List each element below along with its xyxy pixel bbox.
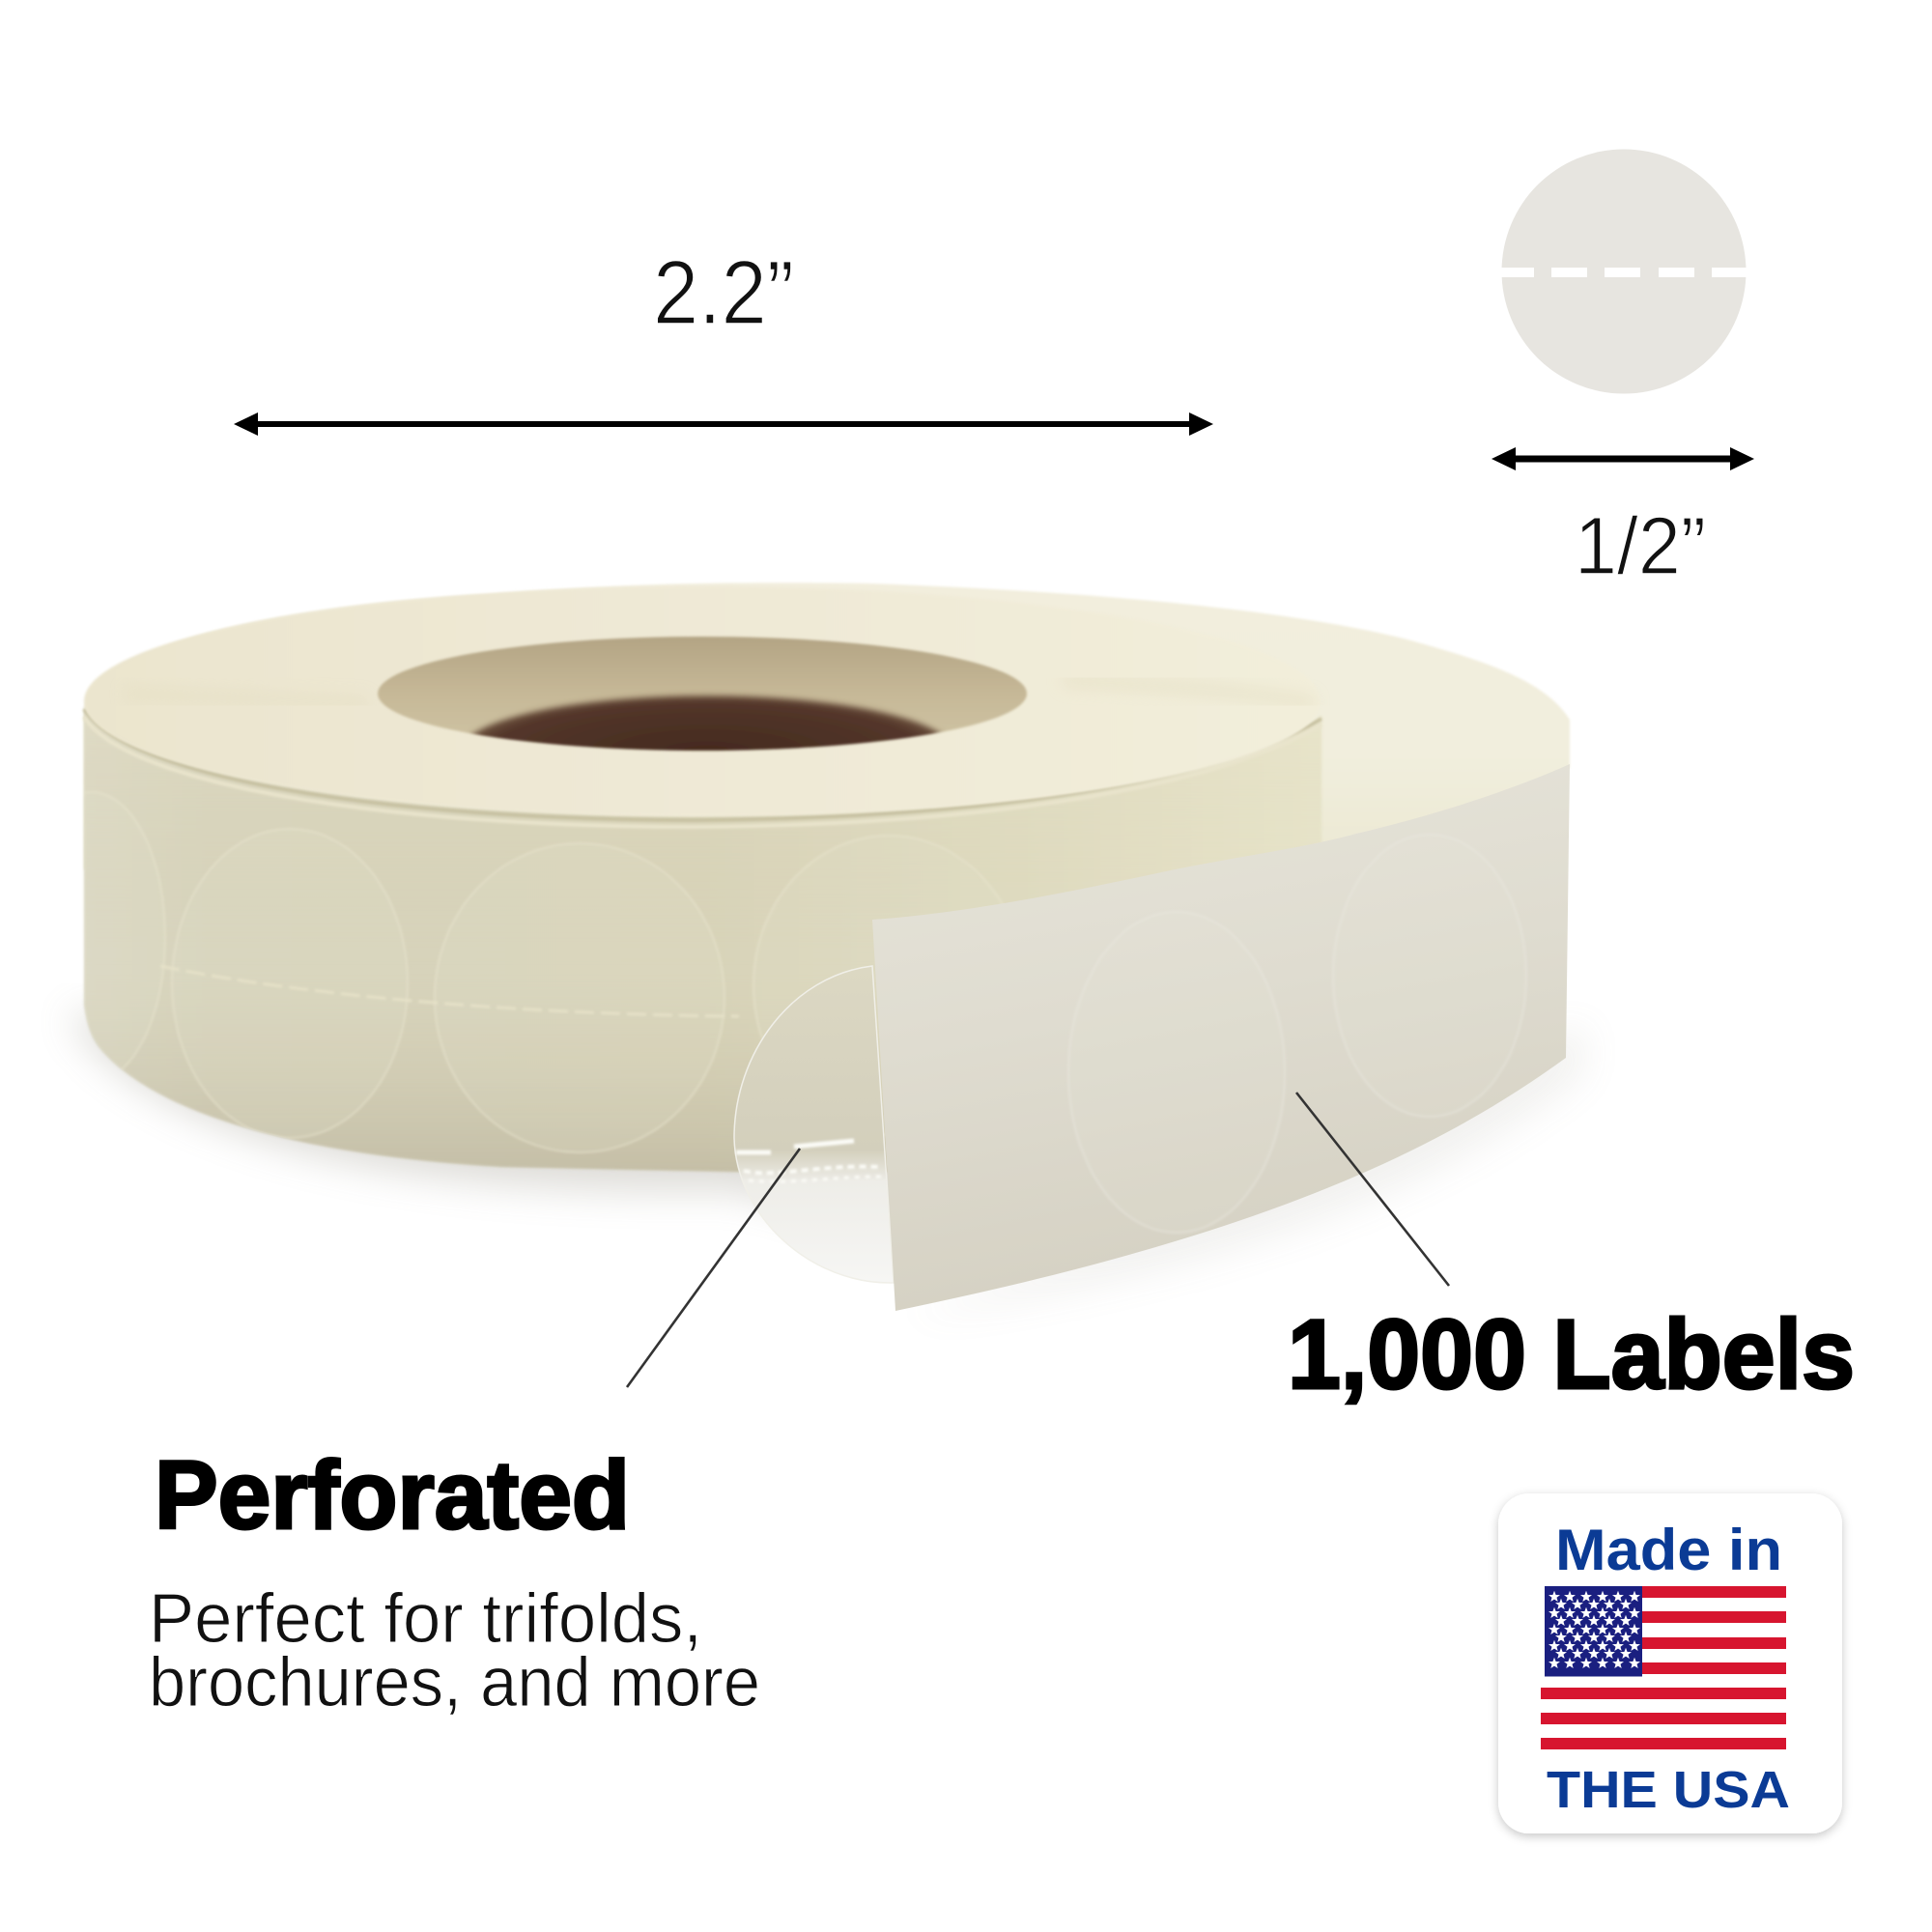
description text: brochures, and more bbox=[149, 1644, 760, 1721]
callout line: 1,000 labels bbox=[1296, 1093, 1449, 1286]
width label: 2.2 inches: 2.2” bbox=[653, 242, 794, 343]
roll outer side bbox=[84, 708, 1321, 1172]
badge text top: Made in bbox=[1555, 1518, 1782, 1582]
labels visible on roll side bbox=[124, 844, 885, 1153]
description text bbox=[149, 1580, 760, 1721]
roll ground shadow bbox=[68, 1014, 1584, 1316]
icon: label circle with perforation bbox=[1497, 149, 1750, 394]
clear peeled label bbox=[734, 966, 894, 1283]
callout heading: 1,000 Labels: 1,000 Labels bbox=[1288, 1299, 1855, 1409]
roll side shading bbox=[84, 708, 1321, 1172]
roll top edge layers bbox=[84, 709, 1321, 827]
description text: Perfect for trifolds, bbox=[149, 1580, 702, 1658]
icon: American flag bbox=[1541, 1586, 1786, 1749]
perforation line on roll bbox=[160, 966, 739, 1016]
product photo: label roll bbox=[18, 582, 1584, 1316]
diameter label: 1/2 inch: 1/2” bbox=[1575, 500, 1706, 591]
arrow: label diameter bbox=[1492, 447, 1754, 470]
callout line: perforated bbox=[627, 1149, 800, 1387]
badge text bottom: THE USA bbox=[1547, 1761, 1790, 1819]
roll core hole bbox=[377, 636, 1028, 753]
unwound label strip bbox=[872, 764, 1570, 1311]
top face mottling bbox=[126, 680, 1314, 703]
badge: made in the USA bbox=[1498, 1493, 1842, 1833]
labels on strip bbox=[1068, 835, 1526, 1233]
badge card bbox=[1498, 1493, 1842, 1833]
roll core inner dark area bbox=[469, 692, 943, 753]
arrow: roll width bbox=[234, 412, 1213, 436]
callout heading: Perforated: Perforated bbox=[155, 1441, 630, 1549]
roll back and unwound strip inner surface bbox=[84, 582, 1570, 927]
roll top face bbox=[84, 586, 1321, 816]
